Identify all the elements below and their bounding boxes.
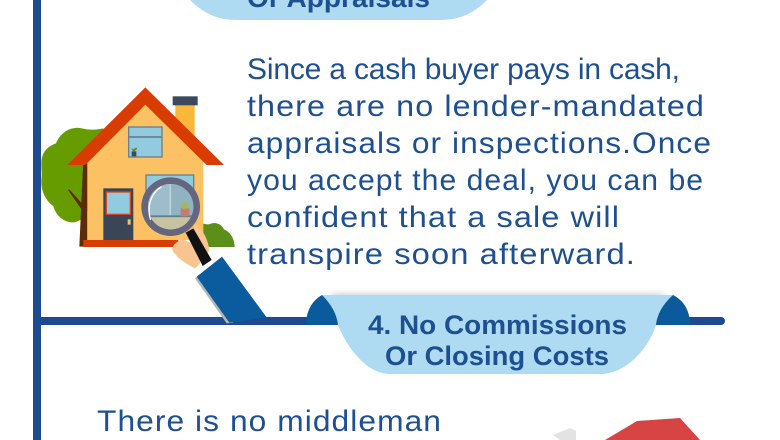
tree bbox=[41, 128, 103, 247]
body text: no middleman: There is no middleman bbox=[97, 405, 442, 438]
right fold tab bbox=[657, 295, 690, 325]
bush bbox=[197, 223, 235, 247]
door bbox=[103, 188, 133, 240]
banner shape bbox=[322, 295, 673, 374]
heading banner shadow bbox=[330, 295, 665, 303]
lower window bbox=[145, 174, 194, 218]
left fold tab bbox=[306, 295, 338, 325]
magnifier lens bbox=[141, 177, 200, 236]
body text: no appraisals: confident that a sale will bbox=[247, 201, 620, 234]
heading banner: no commissions or closing costs bbox=[306, 295, 690, 374]
upper window bbox=[128, 126, 163, 158]
hand bbox=[172, 225, 209, 268]
illustration: red roof bbox=[553, 418, 700, 440]
body text: no appraisals: Since a cash buyer pays in cash, bbox=[247, 53, 680, 86]
sleeve bbox=[195, 257, 267, 323]
heading banner: or appraisals bbox=[190, 0, 487, 20]
body text: no appraisals: there are no lender-mandated bbox=[247, 90, 705, 123]
vertical timeline line bbox=[33, 0, 41, 440]
heading banner: no commissions or closing costs: Or Closing Costs bbox=[385, 341, 609, 371]
body text: no appraisals: transpire soon afterward. bbox=[247, 238, 636, 271]
banner title: 4. No Commissions bbox=[368, 310, 627, 340]
chimney bbox=[173, 96, 198, 137]
magnifier handle bbox=[186, 228, 212, 266]
body text: no appraisals: you accept the deal, you can be bbox=[247, 164, 704, 197]
body text: no appraisals: appraisals or inspections.Once bbox=[247, 127, 712, 160]
roof bbox=[67, 87, 224, 165]
horizontal divider line bbox=[41, 317, 725, 325]
house wall bbox=[87, 103, 203, 240]
illustration: house inspected with magnifying glass bbox=[41, 87, 267, 323]
body text: no appraisals bbox=[247, 53, 712, 271]
house base bbox=[83, 240, 178, 247]
